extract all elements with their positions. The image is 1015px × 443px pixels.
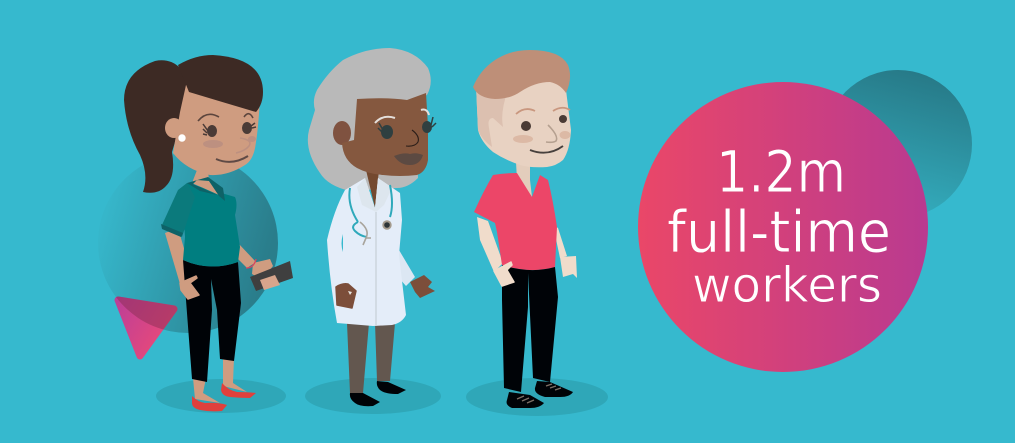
figure: woman with phone: [124, 55, 293, 411]
shirt: [474, 173, 557, 270]
eyebrows: [375, 110, 429, 123]
ear: [333, 121, 351, 145]
ear: [165, 118, 183, 138]
decorative teal circle behind the stat: [824, 70, 972, 218]
phone: [250, 261, 293, 291]
sideburn: [476, 85, 508, 147]
panel: statistic circle: [638, 82, 928, 372]
right hand: [410, 275, 435, 298]
neck: [192, 170, 219, 195]
lips: [394, 153, 423, 165]
hair: [178, 55, 263, 112]
figure: doctor: [308, 48, 436, 406]
coat: [327, 178, 406, 326]
cheeks: [513, 135, 533, 143]
eyebrows: [516, 108, 570, 114]
mouth: [216, 156, 248, 162]
collar: [187, 177, 225, 201]
stethoscope: [349, 185, 392, 245]
hair back: [308, 48, 431, 191]
coat center line: [375, 212, 377, 325]
text: full-time: full-time: [667, 198, 891, 266]
left arm: [165, 228, 192, 284]
left hand: [180, 276, 199, 299]
bracelet: [246, 259, 256, 268]
eyes: [521, 121, 531, 131]
shoes: [192, 383, 256, 411]
neck: [516, 162, 532, 197]
left hand: [336, 284, 356, 308]
left arm: [477, 217, 503, 272]
shoes: [507, 381, 573, 408]
shirt: [183, 183, 240, 267]
right arm: [234, 243, 256, 268]
laces: [517, 384, 561, 403]
eyes: [203, 122, 256, 137]
pocket: [342, 234, 343, 252]
face: [173, 85, 260, 175]
icon: pink triangle: [118, 300, 174, 356]
left hand: [494, 262, 514, 286]
neck: [366, 170, 379, 208]
face: [476, 70, 571, 167]
ponytail: [124, 60, 190, 193]
nose: [546, 125, 557, 142]
pants: [183, 260, 241, 382]
face: [342, 93, 428, 176]
lower legs: [193, 358, 247, 403]
shoes: [350, 381, 406, 406]
eyes: [378, 117, 436, 139]
nose: [236, 138, 250, 153]
fingers: [260, 275, 280, 290]
mouth: [530, 146, 563, 153]
sleeve: [399, 250, 415, 286]
sleeve: [162, 183, 195, 237]
pants: [502, 265, 558, 392]
heading: 1.2m: 1.2m: [716, 138, 846, 206]
eyebrows: [198, 114, 253, 121]
lapels: [357, 178, 392, 212]
right hand: [252, 259, 273, 280]
cheeks: [203, 140, 223, 148]
right arm: [553, 225, 567, 258]
figure: man: [473, 50, 577, 408]
right hand: [560, 256, 577, 278]
nose: [406, 130, 418, 146]
text: workers: workers: [692, 257, 882, 314]
pants: [347, 323, 395, 393]
ground shadows: [156, 378, 608, 416]
earring: [178, 134, 186, 142]
decorative teal circle behind the woman: [98, 153, 278, 333]
hair: [473, 50, 570, 99]
